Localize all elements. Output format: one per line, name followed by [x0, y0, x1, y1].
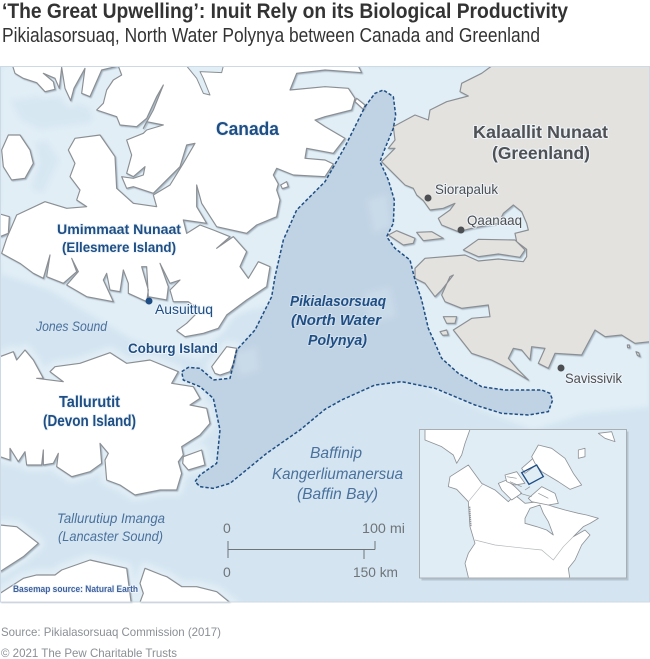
Hudson Bay — [525, 505, 553, 535]
label: Jones Sound: Jones Sound — [35, 318, 108, 334]
label: Devon Island — [43, 394, 136, 430]
scale labels: 100 mi — [362, 520, 405, 536]
label: Pikialasorsuaq: Pikialasorsuaq — [290, 294, 386, 310]
British Columbia coast islands — [469, 507, 471, 527]
land: Canada and Ellesmere Island — [2, 66, 362, 337]
label: Lancaster Sound — [57, 510, 165, 544]
lighter coastal water — [0, 66, 650, 430]
label: Devon Island: (Devon Island) — [43, 413, 136, 430]
label: Canada: Canada — [216, 119, 280, 139]
label: Ellesmere Island: (Ellesmere Island) — [62, 239, 176, 255]
left edge land — [0, 214, 9, 237]
land: Greenland — [382, 66, 650, 380]
label: Baffin Bay: (Baffin Bay) — [297, 486, 378, 503]
label: Ellesmere Island — [57, 221, 181, 255]
label: Ausuittuq: Ausuittuq — [155, 301, 213, 317]
polynya dashed boundary — [182, 90, 553, 488]
marker: Siorapaluk — [424, 194, 432, 202]
label: Baffin Bay: Kangerliumanersua — [272, 466, 403, 483]
Arctic archipelago detail — [507, 477, 548, 498]
label: Greenland: (Greenland) — [492, 143, 590, 163]
inset locator map — [420, 429, 628, 580]
label: Pikialasorsuaq: Polynya) — [308, 333, 367, 349]
small east islands — [281, 182, 288, 189]
polynya lighter patches — [239, 200, 391, 370]
study area box — [522, 465, 543, 484]
scale labels: 0 — [223, 520, 231, 536]
label: Savissivik: Savissivik — [565, 370, 623, 386]
inset background — [420, 430, 626, 578]
label: Pikialasorsuaq — [290, 294, 386, 349]
darker water patches — [16, 98, 90, 189]
scale bar — [223, 520, 405, 580]
label: Greenland — [473, 122, 608, 163]
label: Greenland: Kalaallit Nunaat — [473, 122, 608, 142]
label: basemap source: Basemap source: Natural Earth — [13, 584, 138, 595]
scale labels: 150 km — [353, 564, 398, 580]
polynya area fill — [182, 90, 553, 488]
land: Baffin north — [0, 560, 132, 607]
scale labels — [223, 520, 405, 580]
label: Ellesmere Island: Umimmaat Nunaat — [57, 221, 181, 237]
marker: Savissivik — [558, 364, 564, 372]
marker: Qaanaaq — [458, 226, 464, 234]
borders — [468, 483, 573, 560]
island near Ellesmere coast — [2, 135, 33, 180]
label: Lancaster Sound: Tallurutiup Imanga — [57, 510, 165, 526]
inset land — [425, 429, 615, 580]
scale lines — [228, 541, 375, 559]
inset geography — [425, 429, 615, 580]
label: Lancaster Sound: (Lancaster Sound) — [58, 528, 163, 544]
inset border — [420, 430, 626, 578]
label: Baffin Bay — [272, 445, 403, 503]
title: ‘The Great Upwelling’: Inuit Rely on its Biological Productivity — [2, 0, 568, 23]
label: Pikialasorsuaq: (North Water — [291, 313, 382, 329]
land: Devon Island — [0, 350, 210, 495]
land: Bylot west — [0, 525, 38, 572]
land: Baffin north east — [138, 568, 235, 607]
label: Siorapaluk: Siorapaluk — [435, 181, 499, 197]
Greenland islands — [388, 231, 640, 357]
scale labels: 0 — [223, 564, 231, 580]
land: Canadian Arctic islands — [0, 66, 365, 607]
source note: Source: Pikialasorsuaq Commission (2017) — [1, 625, 221, 639]
subtitle: Pikialasorsuaq, North Water Polynya between Canada and Greenland — [2, 25, 540, 47]
label: Baffin Bay: Baffinip — [310, 445, 362, 462]
inlet in Canada — [187, 66, 223, 95]
marker: Ausuittuq — [146, 298, 152, 304]
label: Devon Island: Tallurutit — [59, 394, 121, 411]
land: Coburg Island — [212, 347, 237, 375]
coastal halo — [1, 342, 240, 602]
small island off Devon — [183, 450, 205, 470]
inset shadow — [422, 432, 628, 580]
label: Coburg Island: Coburg Island — [128, 340, 218, 356]
label: Qaanaaq: Qaanaaq — [467, 212, 522, 228]
